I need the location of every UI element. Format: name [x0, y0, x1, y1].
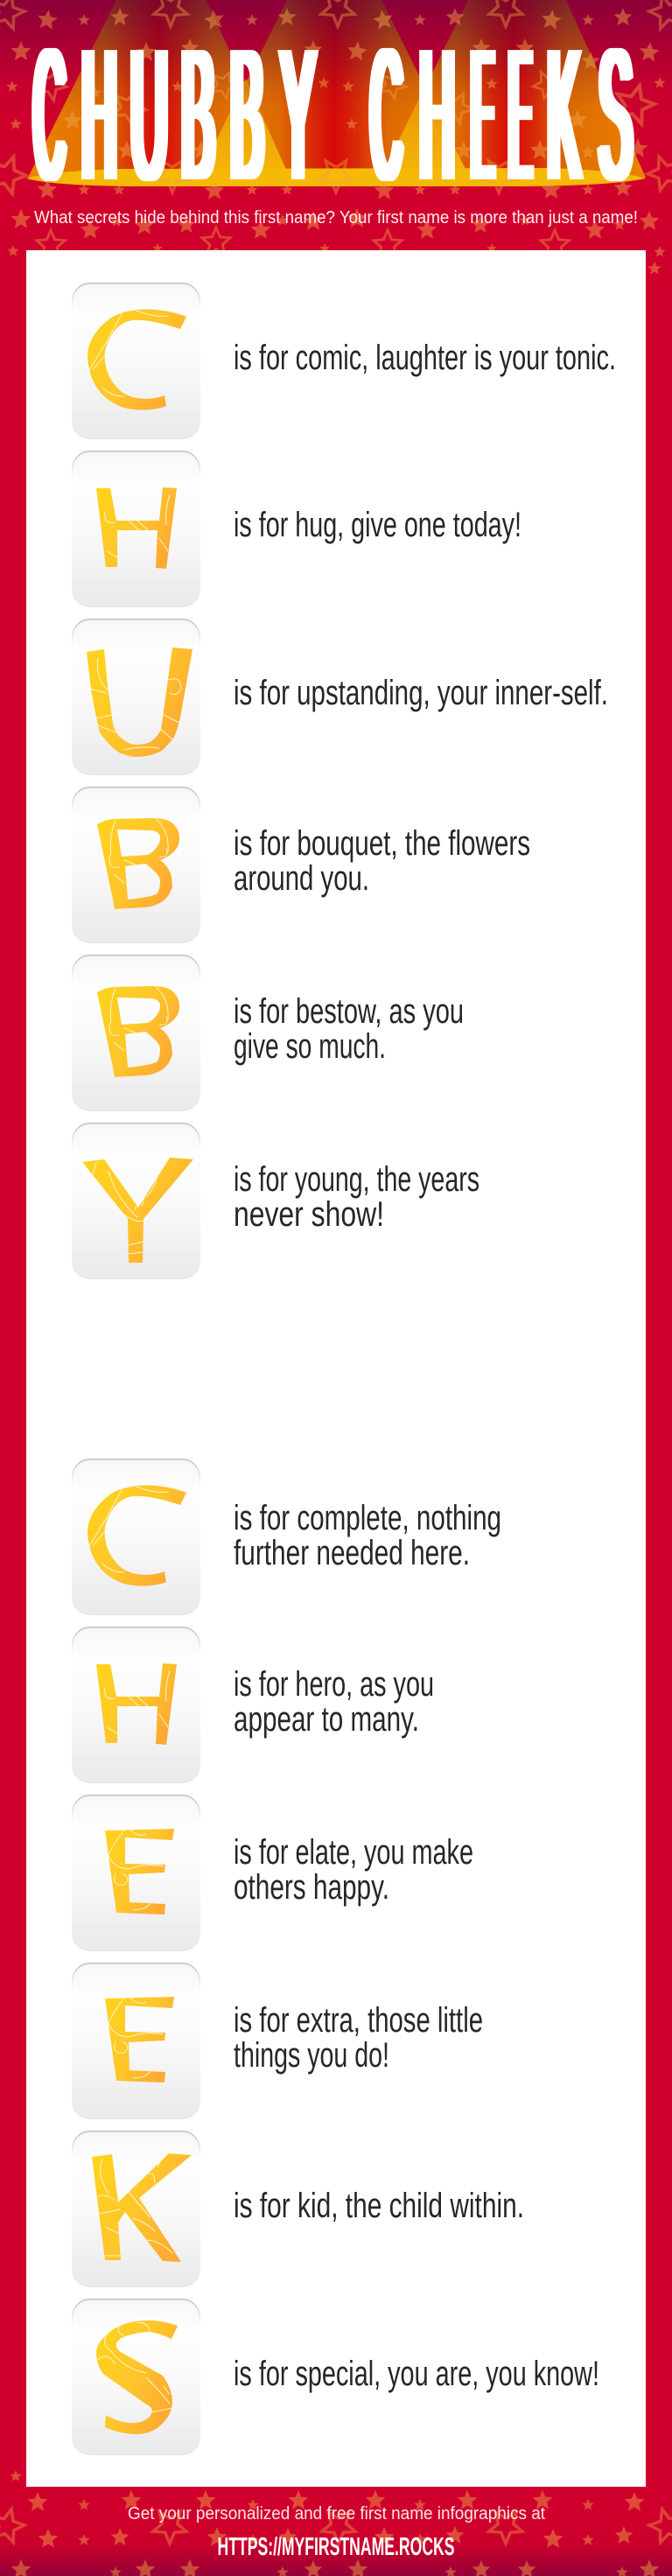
title: K: [548, 10, 580, 220]
icon: letter C: [88, 309, 186, 410]
row: C complete: [72, 1459, 501, 1615]
text: bestow: [234, 992, 464, 1066]
text: young: never show!: [234, 1195, 384, 1234]
title: C: [371, 10, 402, 220]
icon: letter H: [96, 1663, 177, 1745]
row: U upstanding: [72, 619, 608, 775]
text: elate: [234, 1833, 473, 1907]
text: extra: is for extra, those little: [234, 2001, 483, 2040]
row: H hero: [72, 1627, 434, 1783]
row: H hug: [72, 451, 522, 607]
text: hero: is for hero, as you: [234, 1665, 434, 1704]
icon: letter B: [97, 986, 179, 1077]
text: young: [234, 1160, 480, 1234]
icon: letter H: [96, 487, 177, 569]
text: elate: is for elate, you make: [234, 1833, 473, 1872]
row: B bouquet: [72, 787, 530, 943]
title: S: [598, 10, 633, 220]
row: S special: [72, 2299, 599, 2455]
text: complete: is for complete, nothing: [234, 1499, 501, 1537]
title: Y: [281, 10, 316, 220]
text: bestow: give so much.: [234, 1027, 386, 1066]
text: bouquet: [234, 824, 530, 898]
text: hero: [234, 1665, 434, 1739]
text: complete: [234, 1499, 501, 1572]
text: complete: further needed here.: [234, 1534, 470, 1572]
icon: letter U: [87, 648, 192, 757]
text: bouquet: is for bouquet, the flowers: [234, 824, 530, 863]
text: bouquet: around you.: [234, 859, 369, 898]
text: extra: things you do!: [234, 2036, 389, 2075]
text: hug: is for hug, give one today!: [234, 506, 522, 544]
title: [34, 9, 633, 220]
text: hero: appear to many.: [234, 1700, 419, 1739]
title: B: [230, 10, 264, 220]
subtitle: What secrets hide behind this first name? Your first name is more than just a name!: [34, 208, 638, 228]
row: Y young: [72, 1123, 480, 1279]
footer url: HTTPS://MYFIRSTNAME.ROCKS: [217, 2533, 455, 2561]
text: kid: is for kid, the child within.: [234, 2187, 524, 2225]
text: elate: others happy.: [234, 1868, 389, 1907]
icon: letter E: [105, 1828, 174, 1914]
title: E: [509, 9, 531, 220]
row: B bestow: [72, 955, 464, 1111]
title: H: [420, 10, 455, 220]
text: young: is for young, the years: [234, 1160, 480, 1199]
row: E extra: [72, 1963, 483, 2119]
row: K kid: [72, 2131, 524, 2287]
icon: letter B: [97, 818, 179, 909]
icon: letter C: [88, 1485, 186, 1586]
title: U: [130, 10, 168, 220]
title: E: [472, 9, 494, 220]
icon: letter S: [96, 2320, 178, 2434]
row: E elate: [72, 1795, 473, 1951]
text: extra: [234, 2001, 483, 2075]
spotlights: [26, 0, 646, 186]
title: C: [34, 10, 65, 220]
title: H: [82, 10, 117, 220]
row: C comic: [72, 283, 616, 439]
icon: letter K: [92, 2153, 192, 2262]
icon: letter Y: [82, 1158, 193, 1263]
text: bestow: is for bestow, as you: [234, 992, 464, 1031]
footer text: Get your personalized and free first name infographics at: [128, 2504, 545, 2524]
title: B: [181, 10, 215, 220]
icon: letter E: [105, 1996, 174, 2082]
